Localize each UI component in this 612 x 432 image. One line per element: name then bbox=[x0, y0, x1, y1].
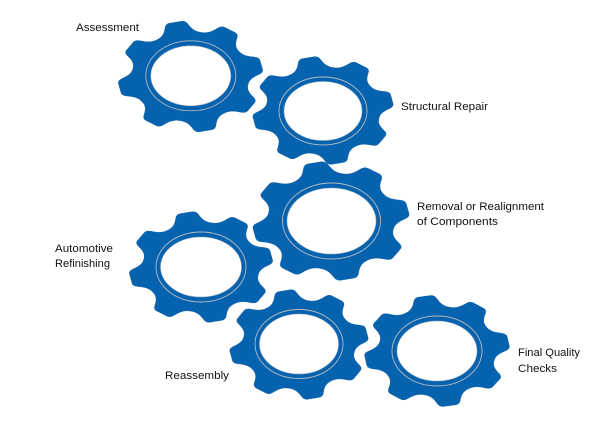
label: Removal or Realignment of Components bbox=[417, 201, 544, 228]
label: Final Quality Checks bbox=[518, 347, 581, 375]
label: Assessment: Assessment bbox=[76, 22, 139, 34]
gear: Automotive Refinishing bbox=[116, 201, 286, 333]
gear: Assessment bbox=[105, 11, 276, 142]
label: Removal or Realignment of Components: of Components bbox=[417, 216, 499, 228]
label: Automotive Refinishing: Automotive bbox=[55, 243, 113, 255]
gear: Removal or Realignment of Components bbox=[238, 151, 424, 291]
label: Removal or Realignment of Components: Removal or Realignment bbox=[417, 201, 544, 213]
label: Reassembly: Reassembly bbox=[165, 370, 230, 382]
label: Automotive Refinishing: Refinishing bbox=[55, 258, 110, 270]
gear: Final Quality Checks bbox=[353, 287, 521, 415]
label: Final Quality Checks: Final Quality bbox=[518, 347, 581, 359]
label: Structural Repair: Structural Repair bbox=[401, 101, 488, 113]
label: Final Quality Checks: Checks bbox=[518, 363, 558, 375]
label: Automotive Refinishing bbox=[55, 243, 113, 270]
gear: Reassembly bbox=[217, 279, 381, 410]
gear: Structural Repair bbox=[240, 47, 406, 174]
